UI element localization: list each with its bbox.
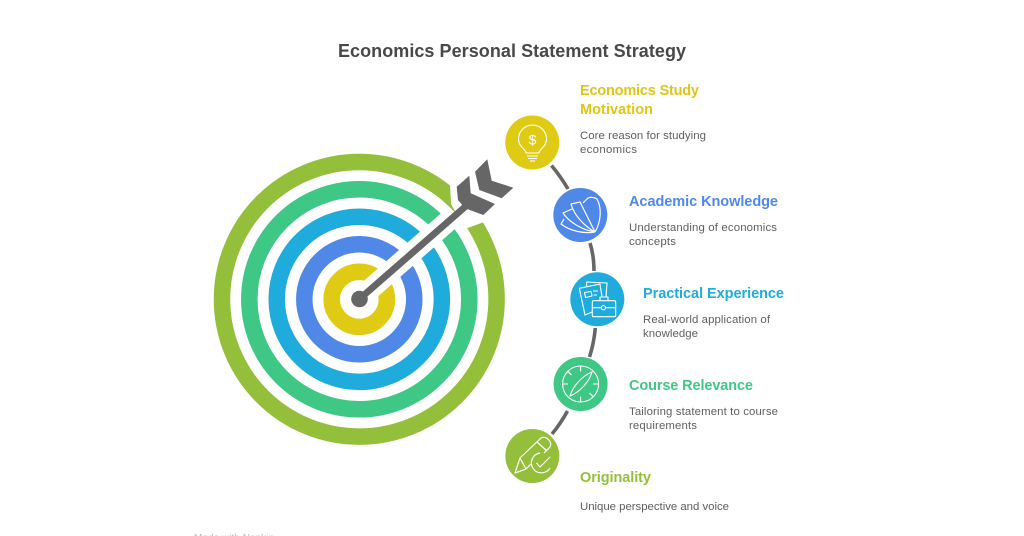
arrow shaft [360, 206, 466, 299]
arrow hub [351, 291, 368, 307]
description: Core reason for studying [580, 130, 706, 142]
ring: course relevance [249, 189, 469, 409]
description: Unique perspective and voice [580, 501, 729, 513]
step 5: originality [505, 429, 729, 513]
step 3: practical experience [570, 272, 784, 340]
heading: Economics Study [580, 83, 699, 99]
description: Understanding of economics [629, 222, 777, 234]
step 1: economics study motivation: Motivation [580, 102, 653, 118]
title: Economics Personal Statement Strategy [338, 41, 686, 61]
heading: Practical Experience [643, 286, 784, 302]
arrow fletching [457, 176, 495, 215]
ring: practical experience [277, 217, 442, 382]
icon: pencil and check [505, 429, 559, 483]
step 1: economics study motivation [505, 83, 706, 170]
target with arrow [222, 159, 513, 437]
icon: documents and briefcase [570, 272, 624, 326]
step 1: economics study motivation: economics [580, 144, 637, 156]
icon: light bulb with dollar: $ [529, 132, 537, 148]
icon: open book [553, 188, 607, 242]
heading: Academic Knowledge [629, 194, 778, 210]
step 4: course relevance: requirements [629, 420, 697, 432]
arrow [351, 159, 513, 307]
step 3: practical experience: knowledge [643, 328, 698, 340]
heading: Originality [580, 470, 651, 486]
heading: Course Relevance [629, 378, 753, 394]
arrow gap [359, 215, 455, 299]
step 2: academic knowledge: concepts [629, 236, 676, 248]
outer ring gap [450, 175, 484, 229]
icon: light bulb with dollar [505, 116, 559, 170]
description: Real-world application of [643, 314, 771, 326]
ring: study motivation [332, 272, 387, 327]
description: Tailoring statement to course [629, 406, 778, 418]
ring: originality [222, 162, 497, 437]
ring: academic knowledge [304, 244, 414, 354]
step 4: course relevance [554, 357, 778, 432]
connector line [552, 166, 595, 434]
icon: compass [554, 357, 608, 411]
step 2: academic knowledge [553, 188, 778, 248]
arrow fletching outer [475, 159, 513, 198]
